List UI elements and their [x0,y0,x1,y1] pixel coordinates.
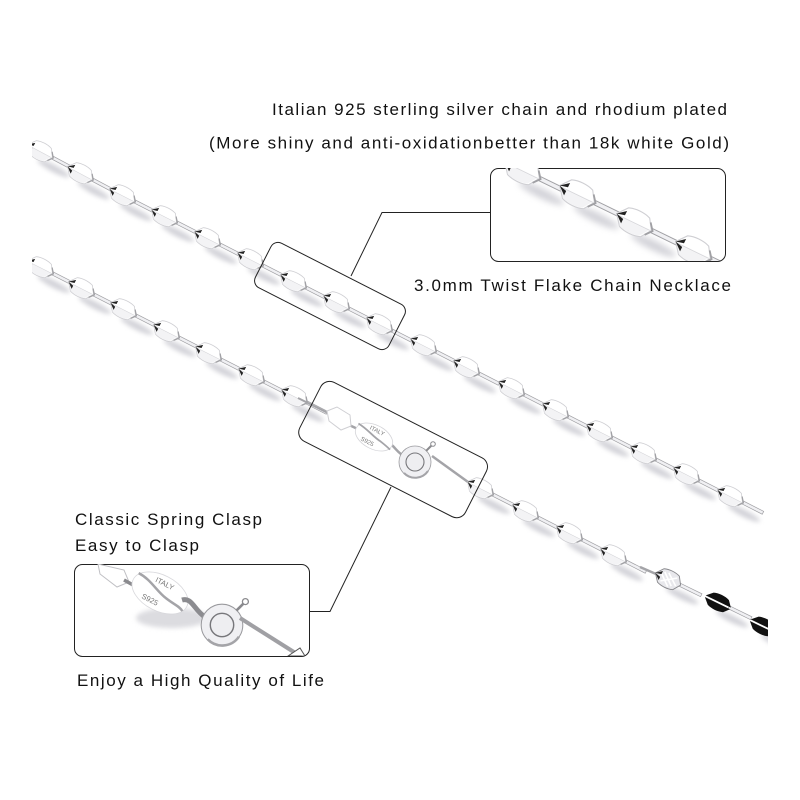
callout box: clasp detail [295,378,491,521]
clasp tag: ITALY [368,425,385,438]
clasp tag [132,572,188,614]
clasp tag [355,422,393,452]
panel: enlarged clasp [74,563,310,656]
callout line: chain detail [351,212,490,276]
chain: lower necklace with clasp [22,253,800,654]
chain: upper necklace [22,136,768,524]
text: clasp heading line 2: Easy to Clasp [75,536,199,555]
panel: enlarged chain [490,168,726,262]
spring ring [201,599,248,646]
text: material line 1: Italian 925 sterling silver chain and rhodium plated [272,100,727,119]
text: chain name: 3.0mm Twist Flake Chain Necklace [414,276,731,295]
text: clasp heading line 1: Classic Spring Clasp [75,510,262,529]
text: material line 2: (More shiny and anti-oxidationbetter than 18k white Gold) [209,134,729,152]
spring ring [399,442,435,478]
clasp tag: S925 [359,436,375,448]
callout box: chain detail [252,240,408,352]
clasp tag: S925 [140,592,160,608]
text: tagline: Enjoy a High Quality of Life [77,671,324,690]
clasp tag: ITALY [154,575,176,592]
callout line: clasp detail [310,487,391,612]
